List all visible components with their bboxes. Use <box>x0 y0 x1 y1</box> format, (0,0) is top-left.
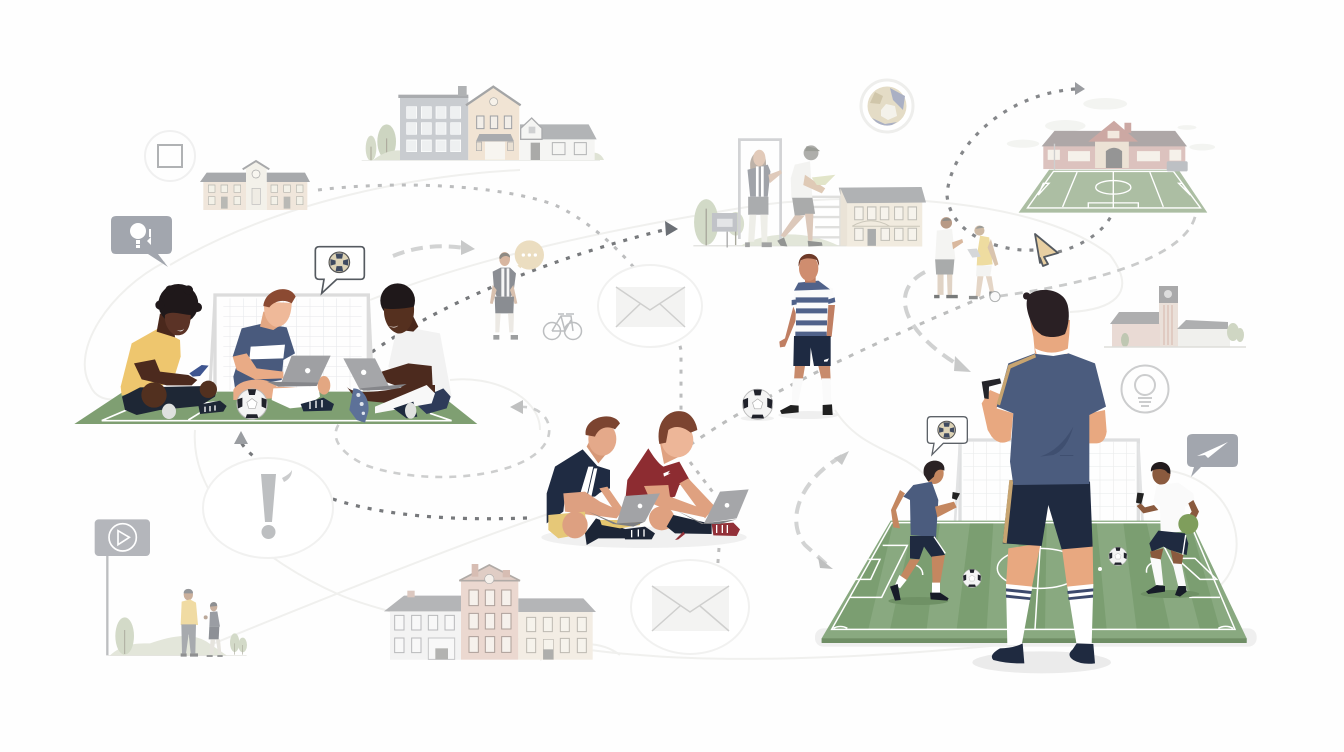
dotted and dashed route lines <box>241 89 1196 575</box>
shadow and ball <box>778 411 838 419</box>
speech bubble: ball <box>927 417 967 455</box>
top right stadium building and pitch <box>934 98 1215 302</box>
icon: lightbulb in circle <box>1122 366 1168 412</box>
beige block <box>466 87 521 160</box>
centre tower <box>459 564 520 660</box>
centre diagonal dotted line <box>690 292 995 445</box>
dotted route to top centre <box>372 229 668 352</box>
clouds <box>1007 98 1215 150</box>
ground shadow <box>541 527 747 548</box>
building: clock tower hall <box>1104 286 1246 347</box>
player left running with phone <box>888 461 960 605</box>
coach seen from behind <box>982 290 1107 664</box>
speech bubble: lightbulb idea <box>111 216 172 267</box>
chat dots bubble <box>515 240 544 270</box>
speech bubble: ball <box>315 247 364 293</box>
speech bubble: paper plane <box>1187 434 1238 477</box>
dashed line to far right building <box>1000 212 1196 296</box>
short dashed arrow line <box>393 246 464 256</box>
right wing <box>518 598 596 660</box>
left group: three boys at goal <box>74 247 477 424</box>
coach shadow <box>972 651 1111 673</box>
main pitch scene with coach <box>815 290 1257 673</box>
balls on pitch <box>963 569 981 587</box>
grey block <box>398 86 468 160</box>
building <box>839 187 926 246</box>
sign with play icon and figures on hill <box>95 519 247 657</box>
curved dashed arrow lines left of pitch <box>796 456 842 564</box>
oval dashed loop <box>336 390 549 477</box>
player in doorway <box>745 150 782 247</box>
building: top centre school <box>362 86 604 161</box>
child figure <box>204 602 223 657</box>
football in front <box>237 389 267 419</box>
player walking with clipboard <box>777 145 835 246</box>
stair rails <box>808 197 840 246</box>
two small players with tablet <box>934 217 998 299</box>
pale dotted route across top <box>318 185 681 415</box>
small player with speech dots <box>490 240 544 340</box>
icon: envelope bubble bottom <box>631 560 749 654</box>
adult figure <box>181 589 198 657</box>
faint background connector curves <box>85 170 1237 660</box>
centre group: two boys with laptops <box>541 411 749 548</box>
football pitch <box>822 521 1247 643</box>
player right with phone and ball <box>1136 462 1199 598</box>
boy in navy striped shirt with laptop <box>233 289 334 411</box>
top centre scene: entrance and two players <box>693 140 926 248</box>
dotted route to left group <box>241 442 527 519</box>
short pale dotted line by boys <box>690 462 719 575</box>
sign board <box>712 213 737 248</box>
left wing <box>384 591 461 660</box>
big looping dotted line <box>947 89 1075 250</box>
standing player with striped shirt <box>741 254 838 421</box>
dashed arrow line to pitch <box>905 272 960 366</box>
boy in navy shirt <box>547 416 660 545</box>
boy in yellow shirt with phone <box>121 284 227 419</box>
icon: muted football badge <box>861 80 913 132</box>
goal behind coach <box>955 440 1143 525</box>
icon: envelope bubble top <box>598 265 702 347</box>
icon: square in circle <box>145 131 195 181</box>
main building <box>1042 121 1188 171</box>
boy in red shirt <box>625 411 749 540</box>
doorway frame <box>739 140 781 242</box>
trees <box>362 124 604 161</box>
mini pitch <box>74 392 477 424</box>
sign <box>95 519 150 655</box>
pitch <box>1019 170 1207 213</box>
building: bottom centre hall <box>384 564 596 660</box>
building: left school <box>200 161 310 210</box>
arrowheads <box>234 82 1085 569</box>
white house <box>520 118 597 160</box>
icon: cursor arrow <box>1035 234 1058 266</box>
icon: bicycle <box>544 314 582 340</box>
small ball <box>990 291 1000 302</box>
boy in white shirt with laptop <box>343 283 452 423</box>
hill and trees <box>108 617 247 656</box>
trees and ground <box>693 199 849 246</box>
goal <box>210 295 373 393</box>
icon: exclamation bubble <box>203 458 333 558</box>
pitch shadow <box>815 628 1257 647</box>
